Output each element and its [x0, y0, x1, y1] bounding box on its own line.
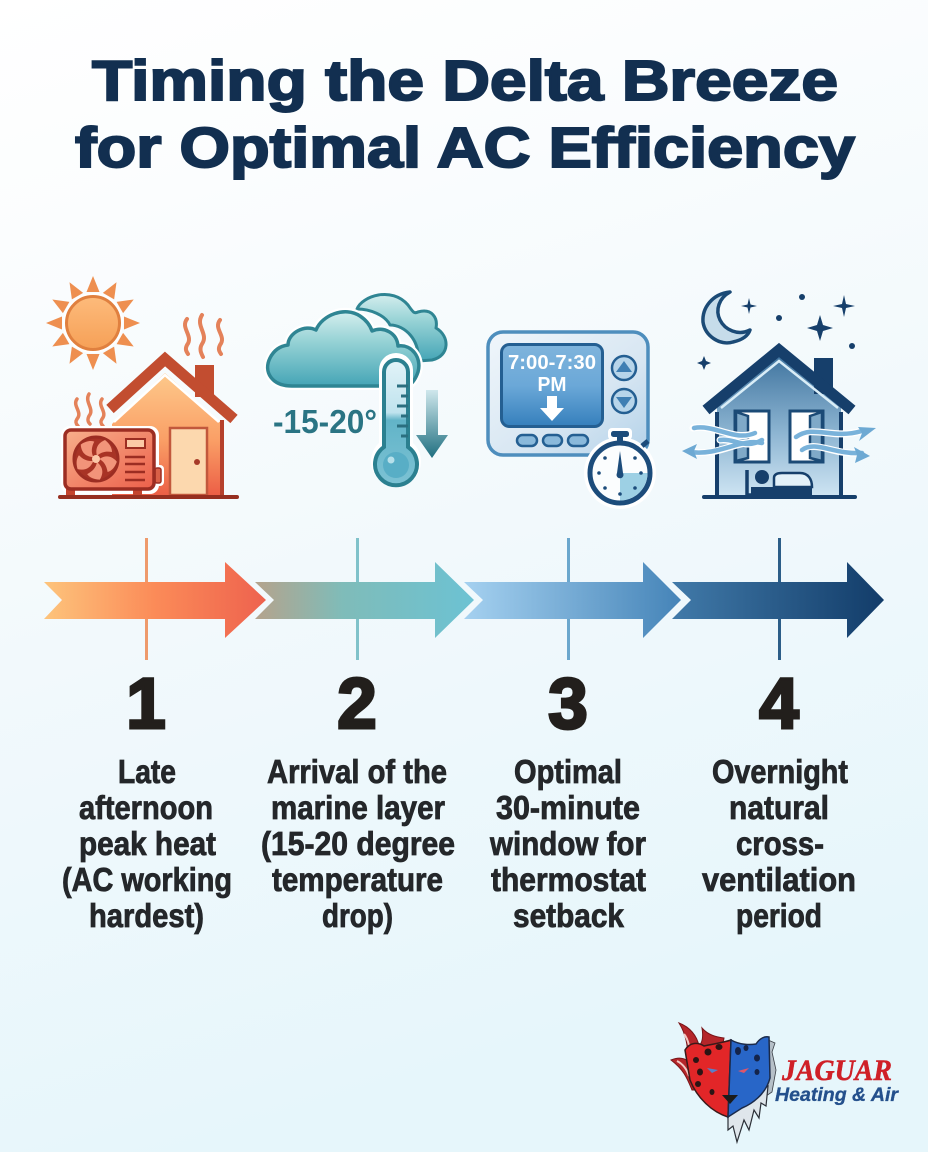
- logo icicles: [728, 1086, 768, 1142]
- icon: hot house with sun and AC unit: [46, 276, 239, 499]
- step numbers: 3: [548, 665, 588, 744]
- icon: back cloud: [357, 294, 446, 361]
- logo: Jaguar Heating & Air: [671, 1023, 900, 1142]
- step 3 text: thermostat: [491, 861, 646, 898]
- icon: house body: [110, 359, 234, 495]
- step 4 text: Overnight: [712, 753, 848, 790]
- step 3 text: [489, 753, 646, 934]
- icon: stars: [697, 294, 855, 370]
- logo text Heating & Air: Heating & Air: [775, 1085, 900, 1106]
- tick marks: [145, 538, 781, 660]
- step numbers: 2: [337, 665, 377, 744]
- step numbers: [126, 665, 799, 744]
- logo text JAGUAR: JAGUAR: [781, 1054, 892, 1087]
- text: temperature drop: -15-20°: [273, 403, 377, 440]
- icon: front cloud outline: [268, 312, 419, 386]
- step 3 text: Optimal: [514, 753, 622, 790]
- step 4 text: [702, 753, 856, 934]
- icon: heat waves above house: [185, 315, 222, 357]
- icon: night house with cross-ventilation: [682, 292, 876, 499]
- ground line: [58, 495, 239, 499]
- step 3 text: setback: [513, 897, 625, 934]
- step 4 text: cross-: [736, 825, 824, 862]
- ground line: [702, 495, 857, 499]
- icon: moon: [703, 292, 750, 343]
- step 4 text: natural: [729, 789, 829, 826]
- thermostat body: [488, 332, 648, 455]
- arrow 2: [255, 562, 474, 638]
- icon: sun: [46, 276, 140, 370]
- step 2 text: drop): [322, 897, 393, 934]
- step 1 text: afternoon: [79, 789, 213, 826]
- icon: bed with sleeper: [747, 470, 812, 495]
- chimney: [814, 358, 833, 394]
- step 1 text: peak heat: [79, 825, 216, 862]
- step 2 text: [261, 753, 455, 934]
- step 3 text: window for: [489, 825, 646, 862]
- logo blue face: [728, 1037, 770, 1117]
- title: for Optimal AC Efficiency: [75, 116, 855, 180]
- thermostat screen: [502, 344, 602, 426]
- step 2 text: (15-20 degree: [261, 825, 455, 862]
- title: [75, 49, 855, 180]
- icon: front cloud: [268, 312, 419, 386]
- step 4 text: ventilation: [702, 861, 856, 898]
- roof: [706, 350, 852, 410]
- arrow 3: [464, 562, 681, 638]
- screen text: 7:00-7:30: [508, 351, 596, 374]
- screen arrow: [540, 396, 564, 421]
- fan: [72, 437, 119, 484]
- thermostat buttons: [517, 356, 636, 446]
- logo frost fur: [766, 1040, 776, 1096]
- timeline: [44, 538, 884, 660]
- step 1 text: Late: [118, 753, 176, 790]
- step 4 text: period: [736, 897, 822, 934]
- step 2 text: marine layer: [271, 789, 445, 826]
- logo flames: [671, 1023, 724, 1090]
- step 2 text: Arrival of the: [267, 753, 447, 790]
- step 3 text: 30-minute: [496, 789, 640, 826]
- arrow 1: [44, 562, 266, 638]
- logo red face: [685, 1040, 731, 1117]
- icon: clouds with thermometer: [268, 294, 448, 486]
- step 1 text: [62, 753, 232, 934]
- icon: thermometer: [371, 353, 421, 486]
- icon: thermostat with stopwatch: [488, 332, 656, 509]
- windows: [735, 411, 823, 462]
- logo spots and features: [693, 1044, 760, 1104]
- icon: stopwatch: [584, 428, 656, 509]
- screen text: [508, 351, 596, 396]
- step 1 text: hardest): [89, 897, 204, 934]
- arrow 4: [672, 562, 884, 638]
- screen text: PM: [538, 373, 566, 396]
- icon: AC unit: [61, 426, 164, 496]
- step 1 text: (AC working: [62, 861, 232, 898]
- step numbers: 4: [759, 665, 799, 744]
- title: Timing the Delta Breeze: [92, 49, 838, 113]
- icon: AC heat waves: [76, 394, 104, 426]
- icon: wind currents: [682, 427, 876, 463]
- icon: down arrow: [416, 390, 448, 458]
- step 2 text: temperature: [272, 861, 443, 898]
- step numbers: 1: [126, 665, 166, 744]
- house body: [717, 355, 841, 497]
